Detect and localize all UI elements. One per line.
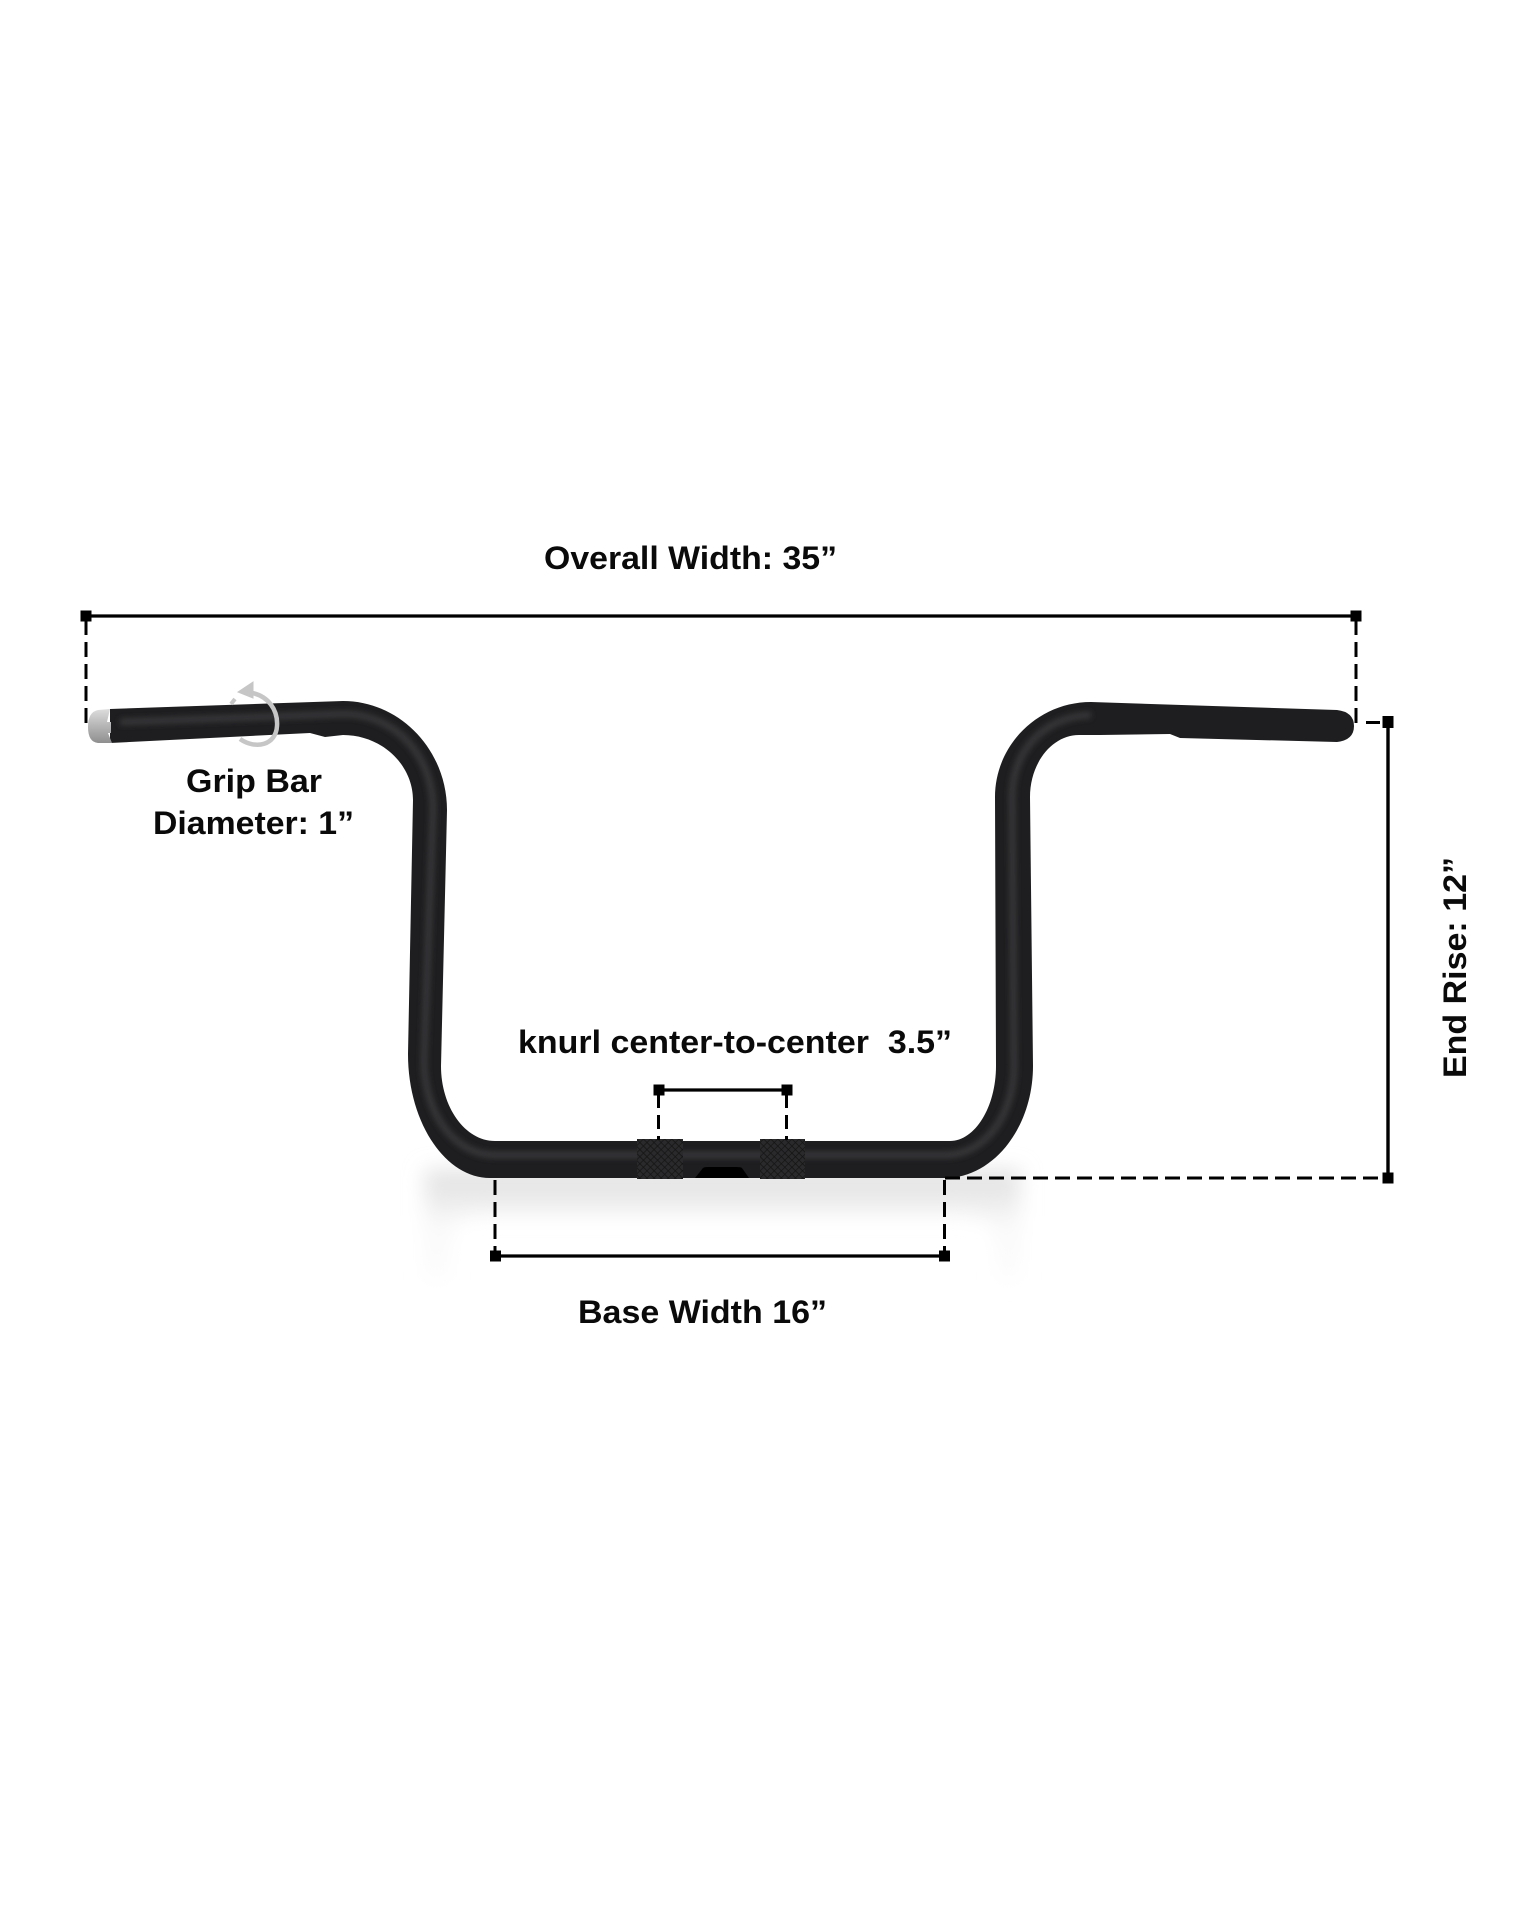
bar body: [110, 701, 1354, 1178]
label: knurl center-to-center: knurl center-to-center 3.5”: [518, 1024, 952, 1060]
label: grip bar diameter: Grip Bar: [186, 763, 322, 799]
rotation arrow icon: [231, 682, 277, 745]
label: base width: Base Width 16”: [578, 1294, 827, 1330]
bar shadow and reflection: [425, 1170, 1020, 1280]
left knurl: [637, 1139, 683, 1179]
silver bar end: [88, 709, 112, 743]
right knurl: [760, 1139, 805, 1179]
label: overall width: Overall Width: 35”: [544, 540, 837, 576]
label: end rise: End Rise: 12”: [1437, 857, 1473, 1078]
label: grip bar diameter: Diameter: 1”: [153, 805, 354, 841]
center slot: [695, 1167, 749, 1178]
label: grip bar diameter: [153, 763, 354, 841]
dimension: end rise: [945, 716, 1473, 1184]
dimension: knurl center-to-center: [518, 1024, 952, 1140]
dimension: base width: [490, 1180, 950, 1330]
dimension: overall width: [80, 540, 1380, 723]
handlebar: [88, 701, 1354, 1179]
bar highlight: [120, 714, 1091, 1155]
